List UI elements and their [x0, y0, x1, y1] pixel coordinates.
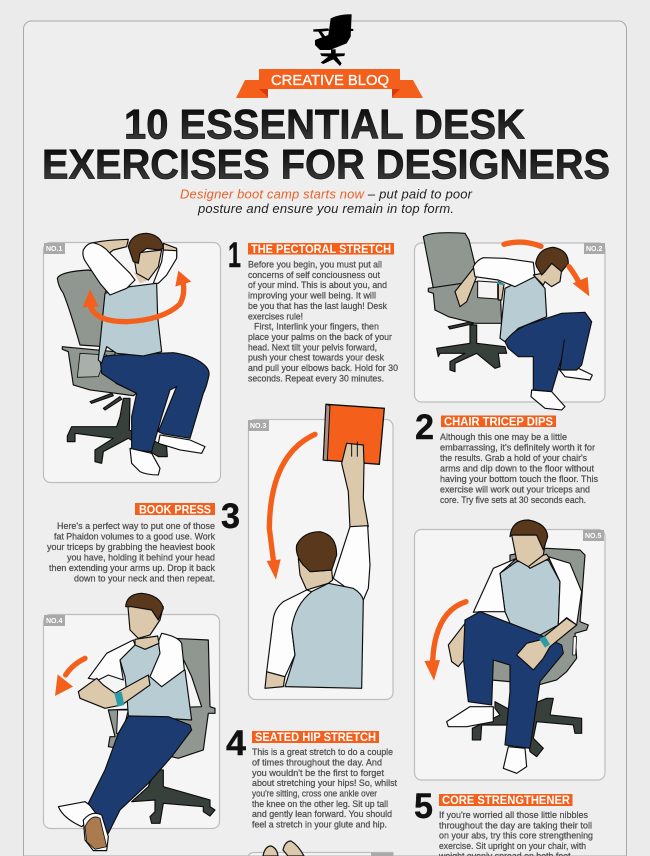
panel: exercise 2 figure: NO.2	[586, 246, 602, 253]
text block: exercise 5: If you're worried all those little nibbles	[439, 810, 588, 820]
text block: exercise 1: improving your well being. It will	[248, 291, 376, 301]
text block: exercise 3	[47, 521, 215, 584]
panel: exercise 5 figure	[414, 520, 605, 780]
text block: exercise 5	[438, 810, 593, 856]
subtitle: posture and ensure you remain in top form.	[197, 201, 454, 216]
number 3: 3	[221, 497, 240, 536]
text block: exercise 4: about stretching your hips! So, whilst	[252, 778, 397, 788]
text block: exercise 1: seconds. Repeat every 30 minutes.	[248, 374, 384, 384]
text block: exercise 4: of times throughout the day. And	[252, 757, 382, 767]
ribbon banner: Creative Bloq: CREATIVE BLOQ	[271, 72, 389, 89]
text block: exercise 4: you're sitting, cross one ankle over	[252, 788, 377, 798]
text block: exercise 2: arms and dip down to the floor without	[440, 464, 594, 474]
panel: exercise 1 figure	[44, 233, 220, 482]
heading: chair tricep dips: CHAIR TRICEP DIPS	[444, 416, 553, 428]
heading: the pectoral stretch: THE PECTORAL STRETCH	[251, 244, 391, 256]
text block: exercise 4: This is a great stretch to do a couple	[252, 747, 393, 757]
panel: exercise 1 figure: NO.1	[46, 246, 62, 253]
text block: exercise 5: exercise. Sit upright on your chair, with	[439, 841, 586, 851]
panel: exercise 6 figure (cropped)	[248, 841, 393, 856]
text block: exercise 3: your triceps by grabbing the heaviest book	[47, 542, 215, 552]
title: 10 ESSENTIAL DESK	[124, 100, 525, 148]
heading: book press: BOOK PRESS	[139, 504, 211, 516]
text block: exercise 3: down to your neck and then repeat.	[74, 574, 215, 584]
text block: exercise 4: the knee on the other leg. Sit up tall	[252, 799, 388, 809]
text block: exercise 1: Before you begin, you must put all	[248, 260, 382, 270]
subtitle: Designer boot camp starts now – put paid to poor	[180, 186, 473, 202]
text block: exercise 3: you have, holding it behind your head	[67, 552, 215, 562]
panel: exercise 4 figure	[44, 593, 220, 851]
text block: exercise 5: throughout the day are taking their toll	[439, 820, 592, 830]
subtitle	[180, 186, 473, 216]
ribbon banner: Creative Bloq	[236, 69, 423, 98]
text block: exercise 3: fat Phaidon volumes to a good use. Work	[54, 532, 215, 542]
icon: office chair	[313, 14, 353, 66]
text block: exercise 4	[252, 747, 397, 830]
title: EXERCISES FOR DESIGNERS	[42, 140, 610, 188]
text block: exercise 1: head. Next tilt your pelvis forward,	[248, 342, 377, 352]
heading: seated hip stretch: SEATED HIP STRETCH	[255, 732, 376, 744]
text block: exercise 4: and gently lean forward. You should	[252, 809, 392, 819]
text block: exercise 4: feel a stretch in your glute and hip.	[252, 820, 387, 830]
text block: exercise 2: embarrassing, it's definitely worth it for	[440, 442, 595, 452]
text block: exercise 2: the results. Grab a hold of your chair's	[440, 453, 587, 463]
title	[42, 100, 610, 188]
panel: exercise 5 figure: NO.5	[585, 533, 601, 540]
text block: exercise 4: you wouldn't be the first to forget	[252, 768, 384, 778]
text block: exercise 1: concerns of self conciousness out	[248, 270, 380, 280]
text block: exercise 1: exercises rule!	[248, 311, 303, 321]
text block: exercise 3: Here's a perfect way to put one of those	[57, 521, 215, 531]
text block: exercise 1: place your palms on the back of your	[248, 332, 392, 342]
text block: exercise 1: First, Interlink your fingers, then	[254, 322, 379, 332]
panel: exercise 3 figure: NO.3	[250, 423, 266, 430]
heading: core strengthener: CORE STRENGTHENER	[442, 795, 571, 807]
text block: exercise 1	[248, 260, 398, 384]
text block: exercise 2: having your bottom touch the floor. This	[440, 474, 598, 484]
text block: exercise 2	[440, 432, 598, 505]
text block: exercise 2: exercise will work out your triceps and	[440, 484, 590, 494]
text block: exercise 2: core. Try five sets at 30 seconds each.	[440, 495, 586, 505]
text block: exercise 3: then extending your arms up. Drop it back	[49, 563, 215, 573]
number 2: 2	[415, 408, 434, 447]
text block: exercise 5: on your abs, try this core strengthening	[439, 831, 593, 841]
panel: exercise 2 figure	[414, 233, 605, 410]
text block: exercise 1: push your chest towards your desk	[248, 353, 384, 363]
number 4: 4	[226, 724, 247, 763]
panel: exercise 3 figure	[248, 404, 393, 700]
text block: exercise 2: Although this one may be a little	[440, 432, 567, 442]
number 1: 1	[228, 236, 241, 275]
text block: exercise 1: and pull your elbows back. Hold for 30	[248, 363, 398, 373]
text block: exercise 1: be you that has the last laugh! Desk	[248, 301, 387, 311]
panel: exercise 4 figure: NO.4	[46, 618, 62, 625]
number 5: 5	[414, 787, 433, 826]
text block: exercise 1: of your mind. This is about you, and	[248, 280, 387, 290]
